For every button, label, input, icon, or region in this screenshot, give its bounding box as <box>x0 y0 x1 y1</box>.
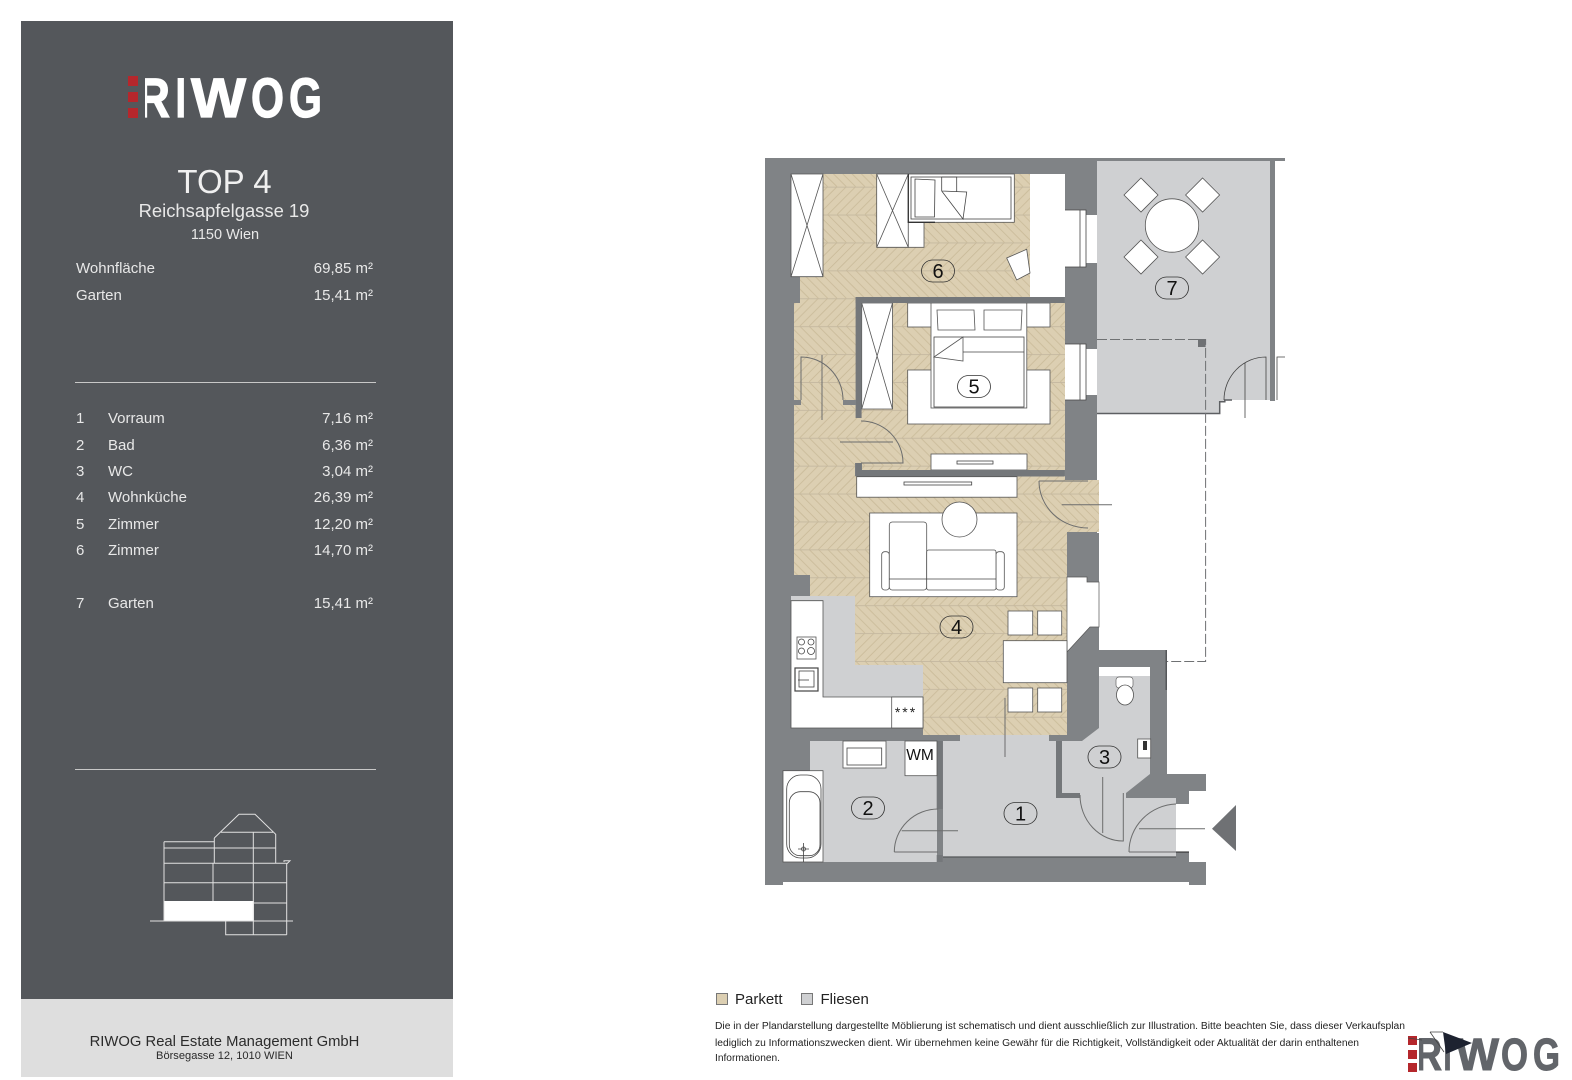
logo: RIWOG: O <box>251 66 284 129</box>
windows <box>1065 210 1099 652</box>
room label 1 <box>1004 802 1037 826</box>
room list: WC <box>108 463 133 480</box>
icon: building section <box>150 814 293 935</box>
kitchen <box>791 601 923 728</box>
room label 6 <box>922 260 954 283</box>
logo: bottom right: G <box>1533 1029 1560 1080</box>
logo: RIWOG: G <box>289 66 322 129</box>
logo: bottom right <box>1404 1029 1560 1080</box>
room label 5: 5 <box>968 376 980 398</box>
summary areas: Garten <box>76 287 122 304</box>
room list: Bad <box>108 437 135 454</box>
logo: RIWOG: W <box>191 66 246 129</box>
room list: 6 <box>76 542 84 559</box>
room label 1: 1 <box>1015 804 1026 826</box>
interior walls <box>794 297 1167 862</box>
room list: 2 <box>76 437 84 454</box>
disclaimer: Informationen. <box>715 1053 780 1064</box>
room list: 7 <box>76 595 84 612</box>
room label 3 <box>1088 746 1121 769</box>
footer address: Börsegasse 12, 1010 WIEN <box>156 1050 293 1062</box>
dashed outline <box>1097 340 1206 662</box>
icon: entrance arrow <box>1212 805 1236 851</box>
parquet areas <box>791 174 1099 735</box>
bathroom fixtures: WM <box>906 747 934 764</box>
room list: 15,41 m² <box>314 595 373 612</box>
footer company name: RIWOG Real Estate Management GmbH <box>90 1034 359 1050</box>
room list: 1 <box>76 410 84 427</box>
room list: Vorraum <box>108 410 165 427</box>
room list: 4 <box>76 489 84 506</box>
room label 4 <box>940 616 973 639</box>
room list: 3,04 m² <box>322 463 373 480</box>
living room furniture <box>857 477 1067 712</box>
room label 7 <box>1156 277 1188 300</box>
room label 2: 2 <box>862 798 874 820</box>
summary areas <box>76 260 373 304</box>
room list: 6,36 m² <box>322 437 373 454</box>
summary areas: 69,85 m² <box>314 260 373 277</box>
logo: RIWOG: R <box>137 66 170 129</box>
room label 4: 4 <box>951 617 962 639</box>
terrace table and chairs <box>1124 178 1220 274</box>
kitchen: *** <box>895 704 917 720</box>
logo: RIWOG <box>126 66 322 129</box>
bathroom fixtures <box>783 741 937 862</box>
logo: bottom right: O <box>1501 1029 1528 1080</box>
terrace garden <box>1096 158 1285 662</box>
room 5 furniture <box>862 303 1050 470</box>
doors <box>801 355 1205 852</box>
disclaimer: Die in der Plandarstellung dargestellte Möblierung ist schematisch und dient ausschließlich zur Illustration. Bitte beachten Sie, dass dieser Verkaufsplan <box>715 1021 1405 1032</box>
floor plan <box>765 158 1285 885</box>
legend: Fliesen: Fliesen <box>820 991 869 1008</box>
tile areas <box>791 596 1189 862</box>
room list: 5 <box>76 516 84 533</box>
room list: 26,39 m² <box>314 489 373 506</box>
room list: 7,16 m² <box>322 410 373 427</box>
room 6 furniture <box>791 174 1065 297</box>
room list: Zimmer <box>108 542 159 559</box>
room label 6: 6 <box>932 261 944 283</box>
walls <box>765 158 1206 885</box>
room list <box>76 410 373 612</box>
disclaimer <box>715 1021 1405 1064</box>
panel: sidebar <box>21 21 453 1077</box>
legend <box>716 991 869 1008</box>
logo: bottom right: W <box>1456 1029 1500 1080</box>
room label 2 <box>852 797 884 820</box>
room label 7: 7 <box>1166 278 1178 300</box>
room list: Wohnküche <box>108 489 187 506</box>
room list: 3 <box>76 463 84 480</box>
WC fixtures <box>1099 667 1151 758</box>
address street: Reichsapfelgasse 19 <box>139 200 309 221</box>
summary areas: Wohnfläche <box>76 260 155 277</box>
logo: bottom right: R <box>1415 1029 1442 1080</box>
logo: RIWOG: I <box>176 66 186 129</box>
address city: 1150 Wien <box>191 227 259 243</box>
disclaimer: lediglich zu Informationszwecken dient. Wir übernehmen keine Gewähr für die Richtigkeit, Vollständigkeit oder Aktualität der darin enthaltenen <box>715 1038 1359 1049</box>
heading: apartment title: TOP 4 <box>177 163 272 200</box>
room list: Zimmer <box>108 516 159 533</box>
terrace door <box>1224 357 1266 418</box>
legend: Parkett: Parkett <box>735 991 783 1008</box>
room label 3: 3 <box>1099 747 1110 769</box>
room list: 12,20 m² <box>314 516 373 533</box>
logo: bottom right: I <box>1444 1029 1452 1080</box>
room list: Garten <box>108 595 154 612</box>
room list: 14,70 m² <box>314 542 373 559</box>
room label 5 <box>958 376 990 398</box>
summary areas: 15,41 m² <box>314 287 373 304</box>
